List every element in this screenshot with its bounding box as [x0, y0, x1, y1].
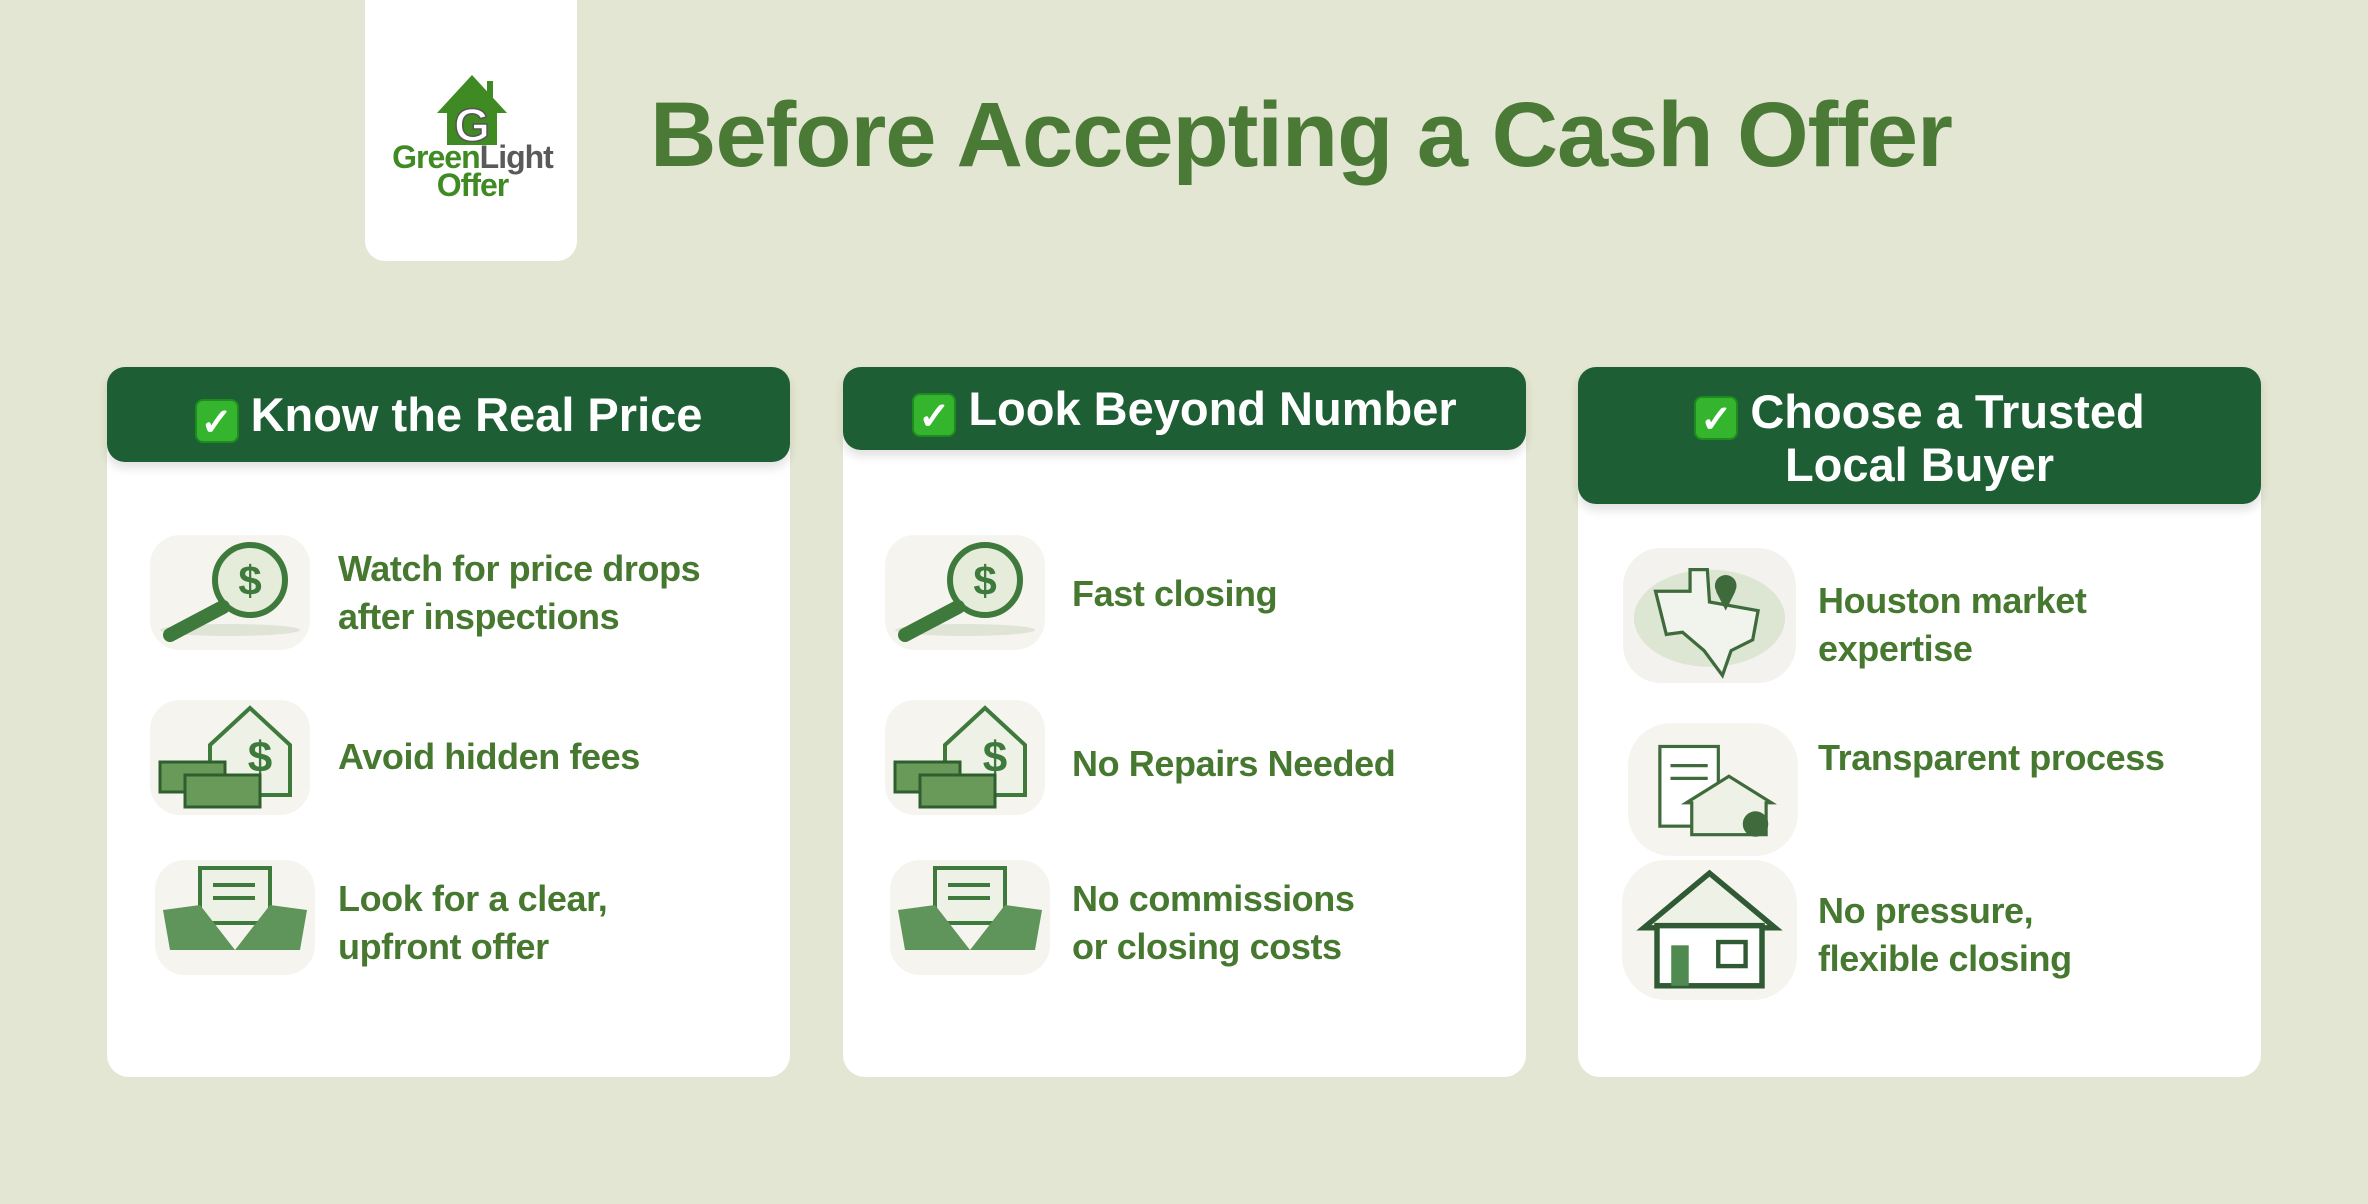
text: No commissions — [1072, 878, 1354, 919]
text: flexible closing — [1818, 938, 2072, 979]
text: Houston market — [1818, 580, 2086, 621]
header: ✓ — [201, 402, 232, 444]
header: Look Beyond Number — [968, 382, 1457, 435]
text: expertise — [1818, 628, 1972, 669]
icon: document house — [1628, 723, 1798, 856]
icon: cash house — [885, 700, 1045, 815]
panel: look beyond number — [843, 367, 1526, 1077]
icon: house — [1622, 860, 1797, 1000]
header: Know the Real Price — [251, 388, 702, 441]
text: Look for a clear, — [338, 878, 607, 919]
text — [338, 548, 700, 637]
text: Watch for price drops — [338, 548, 700, 589]
header: ✓ — [918, 396, 950, 438]
icon: magnifier dollar: $ — [238, 557, 262, 604]
icon: texas map pin — [1623, 548, 1796, 683]
text: Transparent process — [1818, 737, 2165, 778]
text — [338, 878, 607, 967]
header — [843, 367, 1526, 450]
text: No pressure, — [1818, 890, 2033, 931]
icon: cash house — [150, 700, 310, 815]
panel: choose a trusted local buyer — [1578, 367, 2261, 1077]
text: Fast closing — [1072, 573, 1277, 614]
icon: handshake — [890, 860, 1050, 975]
logo text: GreenLight — [392, 139, 553, 175]
text — [1072, 878, 1354, 967]
text: No Repairs Needed — [1072, 743, 1395, 784]
text: after inspections — [338, 596, 619, 637]
text: Avoid hidden fees — [338, 736, 640, 777]
icon: cash house: $ — [248, 733, 272, 782]
text — [1818, 580, 2086, 669]
header: ✓ — [1700, 399, 1732, 441]
logo: house G — [437, 75, 507, 145]
logo text: Offer — [437, 167, 508, 203]
header — [1578, 367, 2261, 504]
text: or closing costs — [1072, 926, 1342, 967]
icon: magnifier dollar — [885, 535, 1045, 650]
icon: magnifier dollar — [150, 535, 310, 650]
icon: handshake — [155, 860, 315, 975]
header: Local Buyer — [1785, 438, 2054, 491]
icon: cash house: $ — [983, 733, 1007, 782]
panel: know the real price — [107, 367, 790, 1077]
header — [107, 367, 790, 462]
icon: magnifier dollar: $ — [973, 557, 997, 604]
text: upfront offer — [338, 926, 549, 967]
text — [1818, 890, 2072, 979]
logo text — [392, 139, 554, 203]
title: Before Accepting a Cash Offer — [650, 84, 1952, 186]
header: Choose a Trusted — [1750, 385, 2145, 438]
logo card — [365, 0, 577, 261]
